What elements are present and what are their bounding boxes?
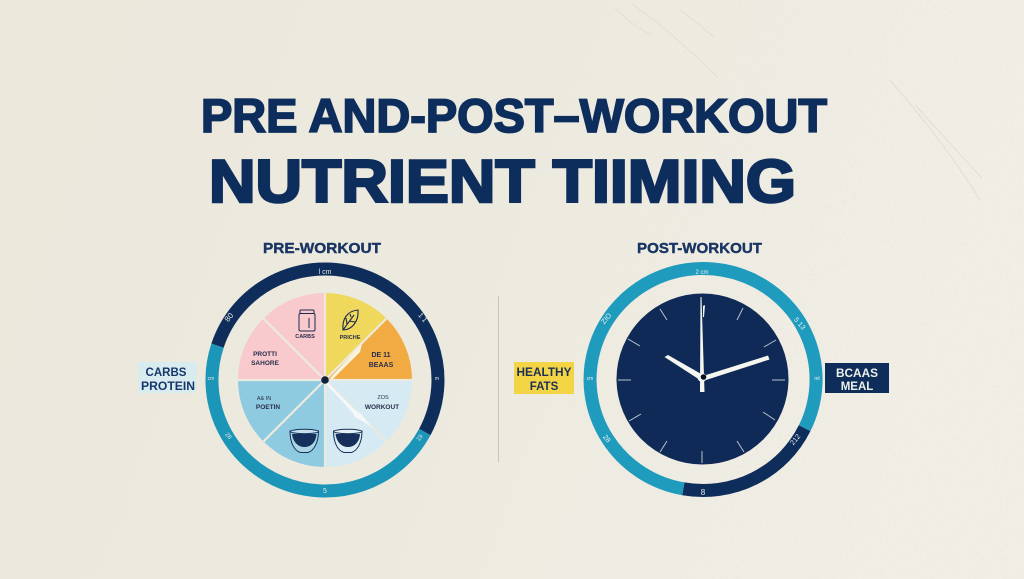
- wedge labels: DE 11: [371, 352, 391, 359]
- ring: pre-workout timeline: [212, 269, 438, 491]
- title: [201, 89, 827, 215]
- ring tick labels: cm: [208, 376, 214, 382]
- panel: post-workout: [514, 240, 889, 497]
- ring: post-workout timeline: [590, 268, 816, 490]
- ring tick labels: 1 1: [416, 312, 428, 324]
- callout: bcaas meal: BCAAS: [836, 368, 878, 380]
- icon: leaf: [343, 310, 358, 330]
- title line 2: NUTRIENT TIIMING: [209, 148, 796, 215]
- ring tick labels: [587, 270, 820, 497]
- ring tick labels: ZIO: [600, 312, 614, 326]
- ring tick labels: 5 13: [792, 317, 806, 332]
- callout: bcaas meal: MEAL: [841, 381, 873, 393]
- icon: bowl left: [290, 429, 318, 452]
- icon: bowl right: [334, 429, 362, 452]
- wedge labels: A& IN: [257, 396, 271, 402]
- callout: carbs protein: [138, 362, 197, 393]
- ring tick labels: l cm: [319, 269, 332, 276]
- callout: healthy fats: HEALTHY: [516, 367, 572, 379]
- wedge labels: BEAAS: [369, 362, 394, 369]
- wedge labels: PROTTI: [253, 351, 277, 358]
- ring tick labels: ml: [814, 376, 820, 382]
- ring tick labels: [208, 269, 439, 495]
- callout: healthy fats: [514, 362, 574, 394]
- wedge labels: ZOS: [377, 395, 389, 401]
- wedge: orange: [325, 318, 412, 380]
- wedge labels: POETIN: [256, 404, 280, 411]
- clock hand: cream: [330, 344, 362, 380]
- ring tick labels: 19: [416, 433, 425, 443]
- ring tick labels: m: [435, 376, 439, 382]
- ring tick labels: 80: [223, 311, 236, 324]
- wedge: pink: [238, 293, 325, 380]
- callout: bcaas meal: [825, 363, 889, 393]
- wedge labels: PRICHE: [340, 335, 361, 341]
- wedge: yellow: [325, 293, 386, 380]
- wedge: pale blue: [325, 380, 412, 467]
- wedge labels: CARBS: [295, 334, 315, 340]
- title line 1: PRE AND-POST–WORKOUT: [201, 89, 827, 142]
- wedge: blue: [238, 380, 325, 467]
- pie chart: [238, 293, 412, 467]
- ring tick labels: 8: [701, 488, 706, 497]
- callout: carbs protein: PROTEIN: [141, 381, 195, 393]
- icon: jar: [299, 310, 315, 331]
- ring tick labels: cm: [587, 376, 593, 382]
- wedge labels: WORKOUT: [365, 404, 399, 411]
- ring tick labels: 5: [323, 488, 327, 495]
- ring tick labels: 2 cm: [695, 270, 709, 276]
- ring tick labels: 28: [223, 432, 233, 441]
- center pin: [698, 373, 706, 382]
- heading: pre-workout: PRE-WORKOUT: [263, 240, 381, 257]
- ring tick labels: 28: [601, 434, 611, 444]
- divider line: [498, 296, 500, 462]
- heading: post-workout: POST-WORKOUT: [637, 240, 762, 257]
- clock face: [616, 294, 788, 464]
- clock ticks: [618, 308, 785, 463]
- center pin: [321, 376, 329, 384]
- panel: pre-workout: [138, 240, 439, 495]
- callout: carbs protein: CARBS: [146, 367, 187, 379]
- clock hand: white arrow: [326, 382, 372, 427]
- ring tick labels: 212: [789, 433, 802, 447]
- clock hands: [664, 297, 770, 392]
- wedge labels: [251, 334, 399, 411]
- callout: healthy fats: FATS: [530, 381, 559, 393]
- wedge labels: SAHORE: [251, 360, 280, 367]
